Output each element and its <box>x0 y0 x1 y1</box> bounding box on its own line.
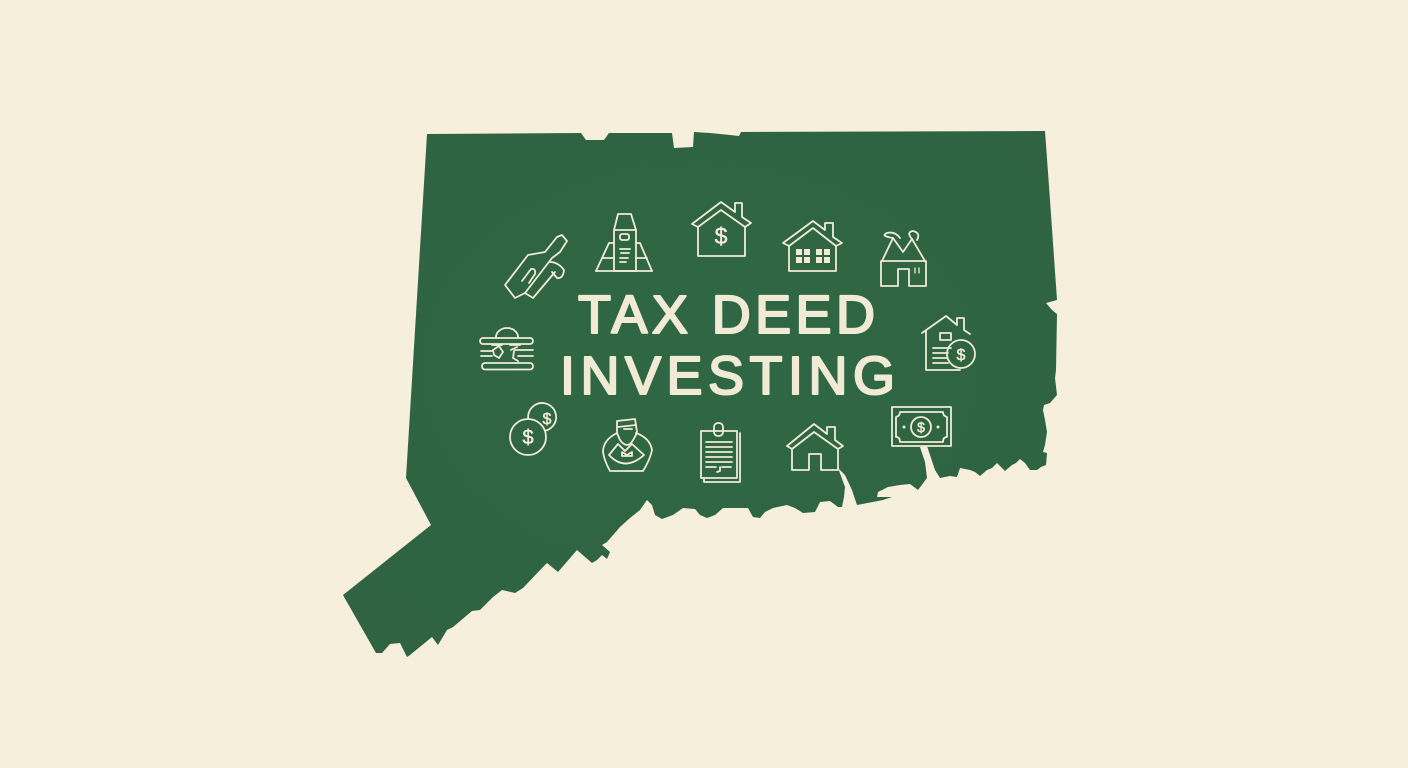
icon: bottle <box>505 235 567 298</box>
icon: person <box>603 419 652 471</box>
icon: banknote <box>892 407 951 446</box>
icon: house with coin <box>922 316 975 370</box>
icon: coins: $ <box>543 411 552 428</box>
icon: banknote: $ <box>917 419 925 435</box>
icon: plain house <box>787 424 843 470</box>
title: INVESTING <box>560 346 895 406</box>
icon: house with dollar <box>692 202 751 256</box>
map: state silhouette <box>343 131 1057 657</box>
icon: house with windows <box>783 221 842 271</box>
icon: coins <box>510 403 556 455</box>
title: TAX DEED <box>578 285 875 345</box>
icon: house with coin: $ <box>957 347 966 364</box>
icon: clipboard <box>701 423 740 482</box>
icon: tower <box>596 214 652 271</box>
title <box>560 285 895 406</box>
icon: house with dollar: $ <box>715 223 728 249</box>
icon: striped dome <box>480 328 533 370</box>
icon: twin peak house <box>881 231 926 286</box>
icon: coins: $ <box>522 427 534 449</box>
